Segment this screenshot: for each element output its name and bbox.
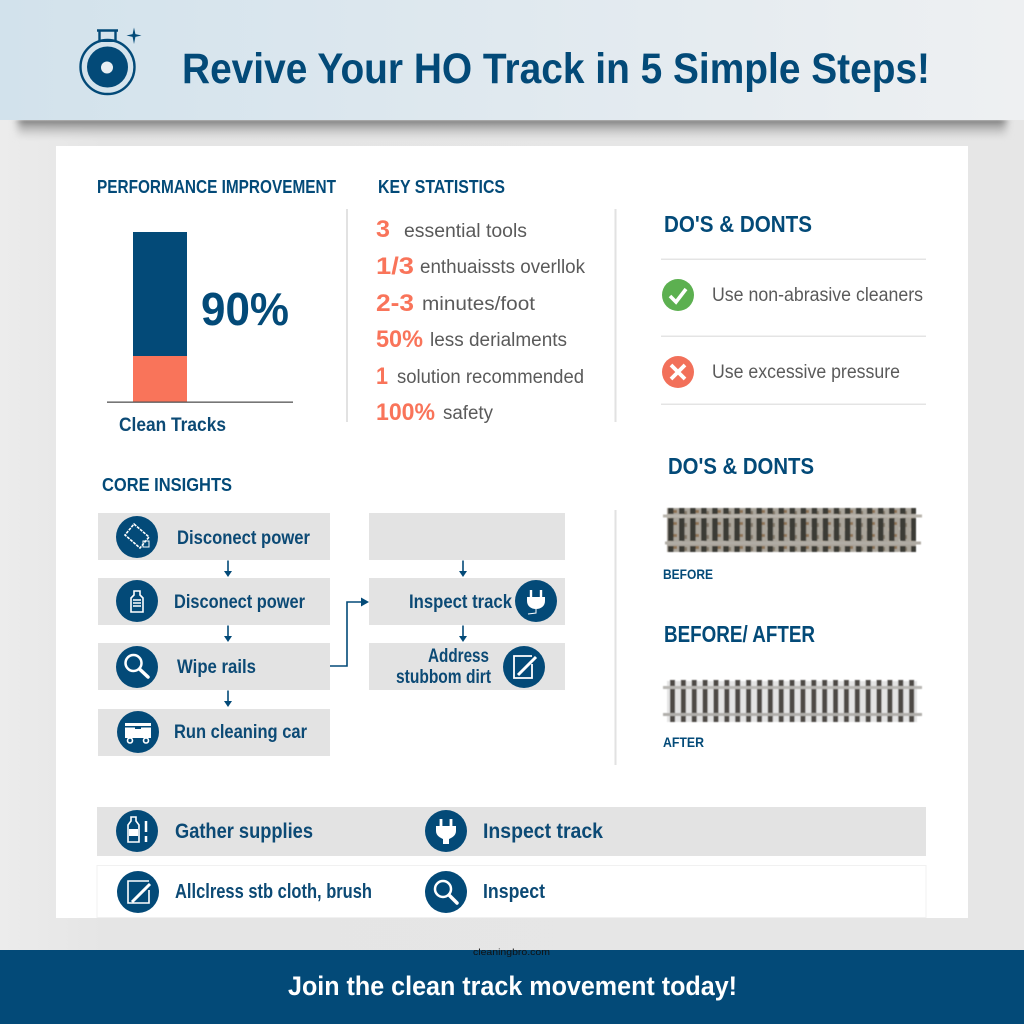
panel: bottom checklist <box>97 807 926 918</box>
stat: 50% less derailments: less derialments <box>430 330 567 351</box>
heading: do's and don'ts: DO'S & DONTS <box>664 211 812 237</box>
image: dirty track <box>663 508 922 552</box>
stat: 50% less derailments <box>376 326 567 353</box>
stat: 1 solution recommended: solution recommended <box>397 367 584 388</box>
panel: performance improvement <box>97 177 336 436</box>
stat: 1/3 enthusiasts <box>376 253 585 280</box>
step: disconnect power 1: Disconect power <box>177 528 311 549</box>
don't item: Use excessive pressure <box>712 362 900 383</box>
stat: 1/3 enthusiasts: enthuaissts overllok <box>420 257 585 278</box>
item: address with cloth and brush: Allclress stb cloth, brush <box>175 881 372 903</box>
bar label: Clean Tracks <box>119 415 226 436</box>
arrow <box>459 560 467 577</box>
item: inspect track <box>425 810 603 852</box>
heading: core insights: CORE INSIGHTS <box>102 475 232 495</box>
step: run cleaning car <box>98 709 330 756</box>
label: before: BEFORE <box>663 566 713 582</box>
step: address stubborn dirt: stubbom dirt <box>396 667 492 688</box>
stat: 100% safety: 100% <box>376 399 435 426</box>
step: disconnect power 2: Disconect power <box>174 592 306 613</box>
header shadow <box>18 120 1006 142</box>
arrow <box>224 626 232 642</box>
step: wipe rails: Wipe rails <box>177 657 256 678</box>
heading: do's and don'ts repeated: DO'S & DONTS <box>668 453 814 479</box>
footer banner <box>0 950 1024 1024</box>
step: run cleaning car: Run cleaning car <box>174 722 308 743</box>
icon: flask with disc and sparkle <box>80 28 142 94</box>
panel: key statistics <box>376 177 585 426</box>
connector arrow between columns <box>330 598 369 666</box>
flowchart: left column <box>98 513 330 756</box>
white content panel <box>56 146 968 918</box>
heading: before and after: BEFORE/ AFTER <box>664 621 815 647</box>
row 2 background <box>97 866 926 918</box>
title: Revive Your HO Track in 5 Simple Steps! <box>182 45 930 93</box>
value: 90%: 90% <box>201 283 289 335</box>
step: inspect track <box>369 578 565 625</box>
empty step <box>369 513 565 560</box>
stat: 1/3 enthusiasts: 1/3 <box>376 253 414 280</box>
icon: check <box>662 279 694 311</box>
stat: 100% safety <box>376 399 493 426</box>
header banner <box>0 0 1024 120</box>
step: inspect track: Inspect track <box>409 592 512 613</box>
stat: 3 essential tools: essential tools <box>404 221 527 242</box>
item: gather supplies <box>116 810 313 852</box>
stat: 3 essential tools: 3 <box>376 216 390 243</box>
panel: before and after <box>663 453 922 750</box>
step: disconnect power 2 <box>98 578 330 625</box>
stat: 2-3 minutes per foot <box>376 290 536 317</box>
heading: key statistics: KEY STATISTICS <box>378 177 505 197</box>
item: inspect <box>425 871 545 913</box>
stat: 1 solution recommended: 1 <box>376 363 388 390</box>
stat: 2-3 minutes per foot: 2-3 <box>376 290 414 317</box>
item: inspect track: Inspect track <box>483 820 603 843</box>
step: wipe rails <box>98 643 330 690</box>
step: disconnect power 1 <box>98 513 330 560</box>
heading: performance improvement: PERFORMANCE IMPROVEMENT <box>97 177 336 197</box>
call to action: Join the clean track movement today! <box>288 971 737 1001</box>
stat: 3 essential tools <box>376 216 527 243</box>
flowchart: right column <box>369 513 565 690</box>
row 1 background <box>97 807 926 856</box>
do item: Use non-abrasive cleaners <box>712 285 923 306</box>
icon: cross <box>662 356 694 388</box>
bar chart: clean tracks <box>107 232 293 403</box>
step: address stubborn dirt <box>369 643 565 690</box>
stat: 2-3 minutes per foot: minutes/foot <box>422 294 536 315</box>
arrow <box>224 690 232 707</box>
stat: 50% less derailments: 50% <box>376 326 423 353</box>
arrow <box>224 560 232 577</box>
arrow <box>459 626 467 642</box>
label: after: AFTER <box>663 734 704 750</box>
panel: do's and don'ts <box>661 211 926 405</box>
stat: 100% safety: safety <box>443 403 493 424</box>
stat: 1 solution recommended <box>376 363 584 390</box>
item: gather supplies: Gather supplies <box>175 820 313 843</box>
item: address with cloth and brush <box>117 871 372 913</box>
step: address stubborn dirt: Address <box>428 646 489 667</box>
image: clean track <box>663 680 922 722</box>
item: inspect: Inspect <box>483 881 545 903</box>
watermark: cleaningbro.com <box>473 947 550 958</box>
